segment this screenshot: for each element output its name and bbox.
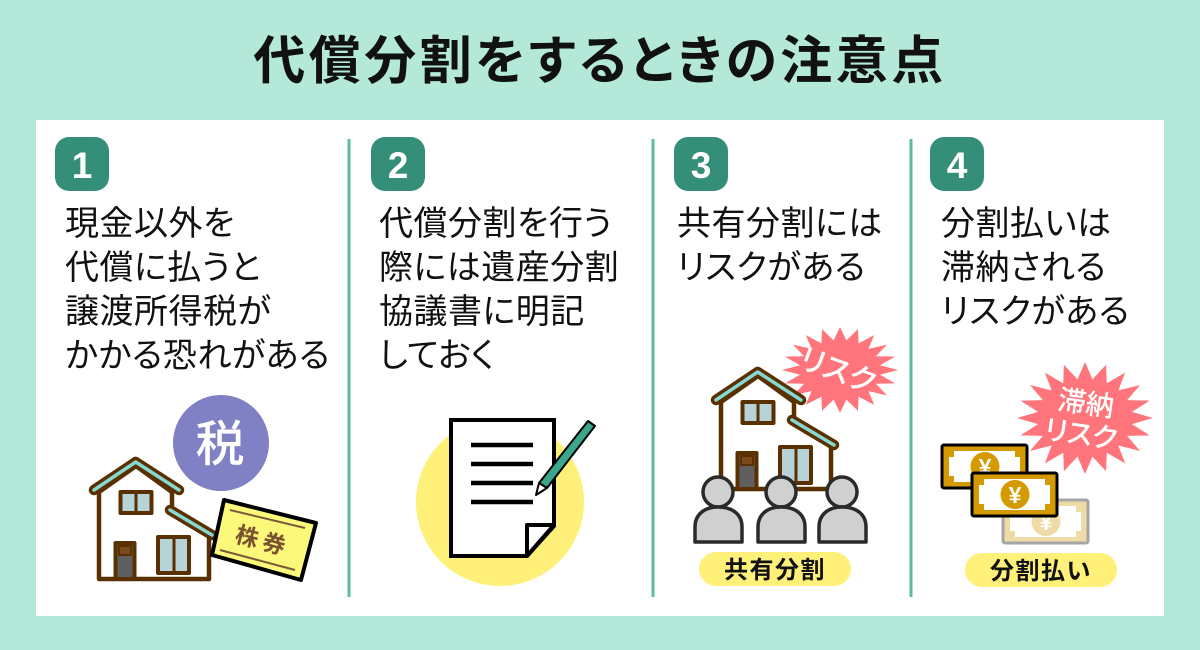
text: point 2: しておく [379,328,495,377]
icon: house [94,462,212,579]
text: point 4: 分割払いは [941,196,1112,245]
number badge 4: 4 [947,145,968,186]
text: point 1 [65,196,330,377]
icon: banknotes: ¥ [1040,509,1053,535]
number badge 1 [55,137,109,191]
text: point 3 [677,196,883,289]
icon: pencil [536,421,595,495]
text: point 1: 現金以外を [65,196,235,245]
number badge 3 [674,137,728,191]
icon: risk burst [782,327,898,413]
text: point 2: 代償分割を行う [379,196,612,245]
number badge 4 [930,137,984,191]
text: point 4: リスクがある [941,284,1130,333]
icon: late payment risk burst [1017,362,1153,474]
label pill: 分割払い: 分割払い [990,551,1092,586]
main white panel [36,120,1164,616]
icon: late payment risk burst: 滞納 [1056,378,1117,426]
text: point 1: かかる恐れがある [65,328,330,377]
text: point 2 [379,196,619,377]
label pill: 分割払い [965,551,1117,587]
title: 代償分割をするときの注意点 [253,19,947,94]
panel: point 1 [55,137,330,580]
panel: point 2 [371,137,619,586]
icon: banknotes [942,445,1088,543]
icon: stock certificate [212,500,316,580]
text: point 1: 代償に払うと [65,240,261,289]
label pill: 共有分割: 共有分割 [724,550,826,585]
icon: banknotes: ¥ [1009,482,1022,508]
label pill: 共有分割 [699,550,851,586]
icon: late payment risk burst: リスク [1042,408,1120,458]
icon: three people [695,477,866,542]
icon: tax circle [173,395,269,491]
icon: house [716,372,834,489]
icon: tax circle: 税 [195,405,245,476]
number badge 1: 1 [72,145,92,186]
icon: risk burst: リスク [794,334,883,402]
number badge 3: 3 [691,145,711,186]
text: point 2: 協議書に明記 [379,284,585,333]
icon: document [451,420,554,556]
panel: point 3 [674,137,898,586]
panel: point 4 [930,137,1153,587]
text: point 3: 共有分割には [677,196,883,245]
text: point 3: リスクがある [677,240,866,289]
icon: stock certificate: 株券 [232,515,295,563]
text: point 4: 滞納される [941,240,1106,289]
icon: banknotes: ¥ [979,454,992,480]
number badge 2 [371,137,425,191]
text: point 4 [941,196,1130,333]
text: point 2: 際には遺産分割 [379,240,619,289]
icon: yellow circle [416,418,584,586]
number badge 2: 2 [388,145,408,186]
text: point 1: 譲渡所得税が [65,284,271,333]
